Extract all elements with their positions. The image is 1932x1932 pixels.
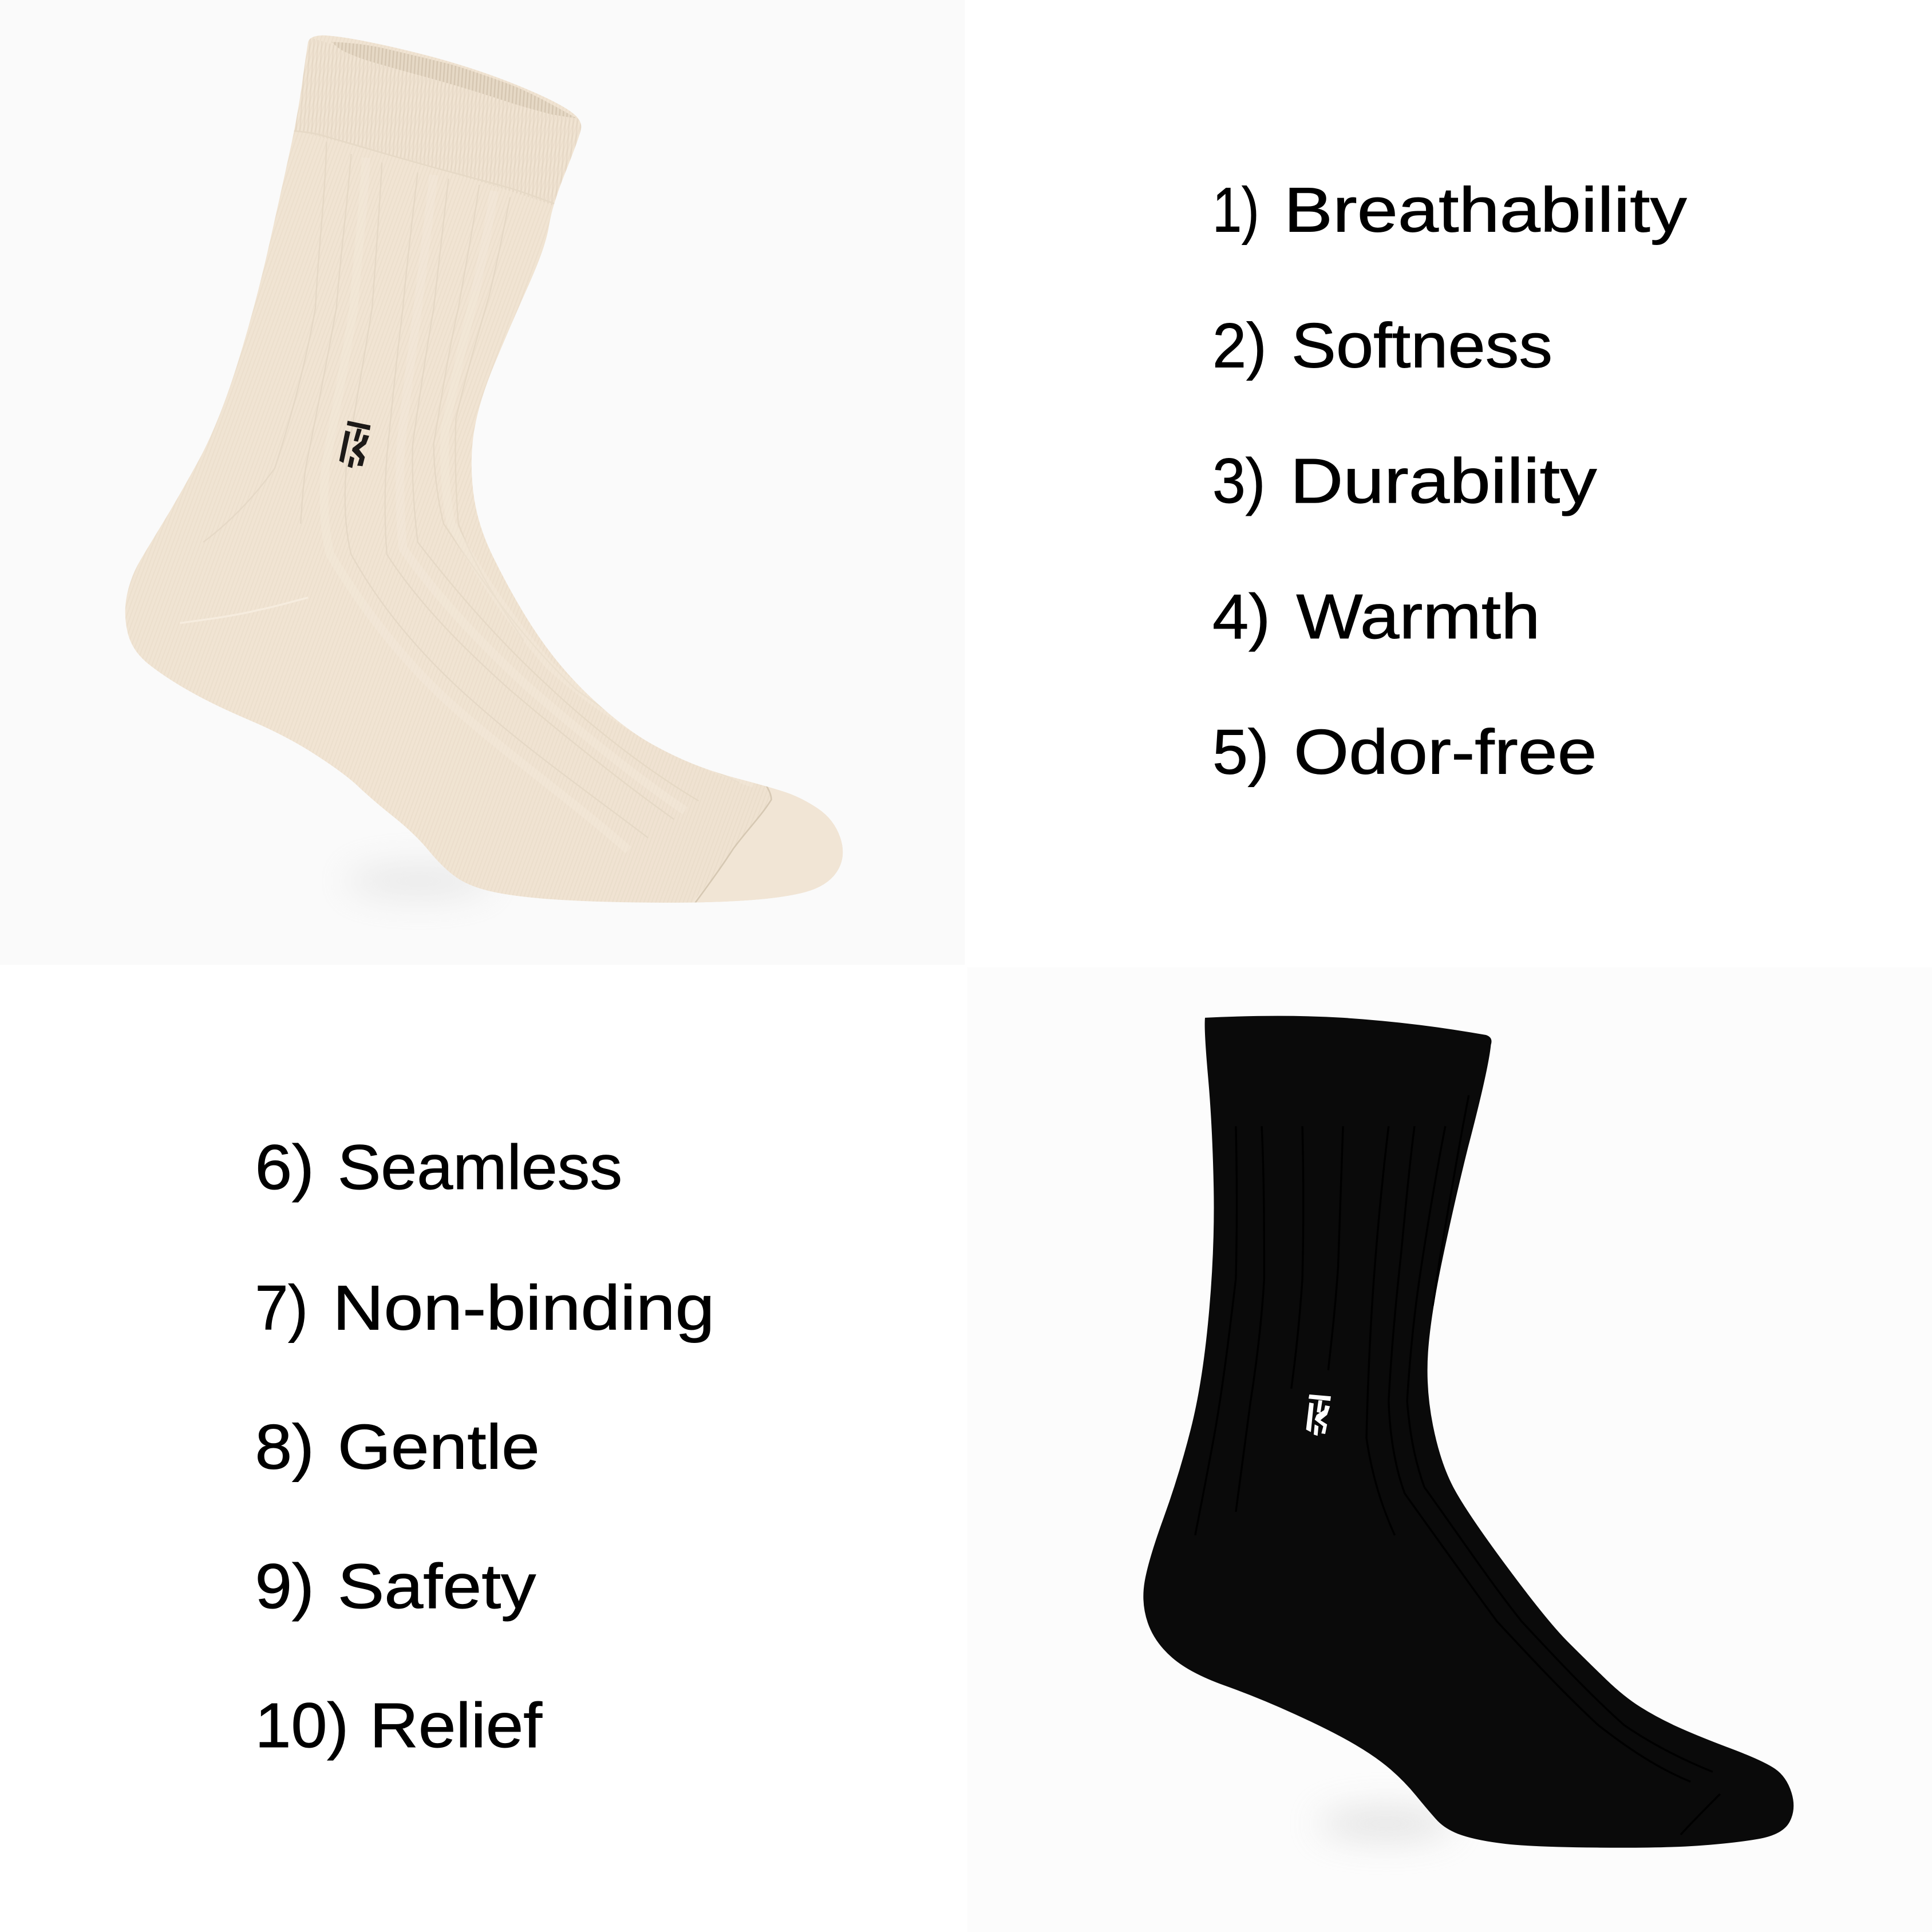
black sock — [1127, 1004, 1811, 1860]
item 8 — [255, 1412, 540, 1483]
item 9: 9) — [255, 1551, 314, 1622]
item 5: Odor-free — [1294, 717, 1597, 788]
panel: black sock photo — [967, 967, 1932, 1932]
item 6: 6) — [255, 1132, 314, 1203]
ribs — [1195, 1096, 1720, 1835]
item 3: Durability — [1290, 446, 1597, 516]
toe seam — [1681, 1794, 1720, 1835]
item 8: Gentle — [338, 1412, 540, 1483]
sock shadow — [1318, 1808, 1454, 1840]
item 10: Relief — [370, 1690, 542, 1761]
item 4 — [1212, 582, 1540, 652]
toe cap — [684, 776, 863, 912]
item 1: 1) — [1212, 175, 1259, 246]
item 3 — [1212, 446, 1597, 516]
item 8: 8) — [255, 1412, 314, 1483]
item 7: 7) — [255, 1273, 308, 1343]
item 2: 2) — [1212, 310, 1267, 381]
sock opening — [331, 42, 576, 118]
item 5: 5) — [1212, 717, 1269, 788]
item 2: Softness — [1291, 310, 1552, 381]
panel: beige sock photo — [125, 35, 843, 912]
item 4: 4) — [1212, 582, 1270, 652]
item 9 — [255, 1551, 536, 1622]
heel seam — [180, 598, 308, 623]
item 7: Non-binding — [333, 1273, 714, 1343]
item 1: Breathability — [1284, 175, 1687, 246]
toe seam — [695, 784, 771, 903]
cuff band edge — [290, 131, 557, 204]
item 10: 10) — [255, 1690, 349, 1761]
item 4: Warmth — [1296, 582, 1540, 652]
ribs — [203, 142, 739, 838]
logo: TK mark — [339, 421, 370, 468]
item 3: 3) — [1212, 446, 1266, 516]
cuff knit — [290, 37, 585, 206]
beige sock — [111, 25, 863, 912]
item 6: Seamless — [338, 1132, 622, 1203]
item 9: Safety — [338, 1551, 536, 1622]
list: features one to five — [1212, 175, 1687, 788]
sock shadow — [345, 864, 493, 898]
logo: TK mark — [1306, 1394, 1331, 1436]
item 10 — [255, 1690, 542, 1761]
list: features six to ten — [255, 1132, 714, 1761]
